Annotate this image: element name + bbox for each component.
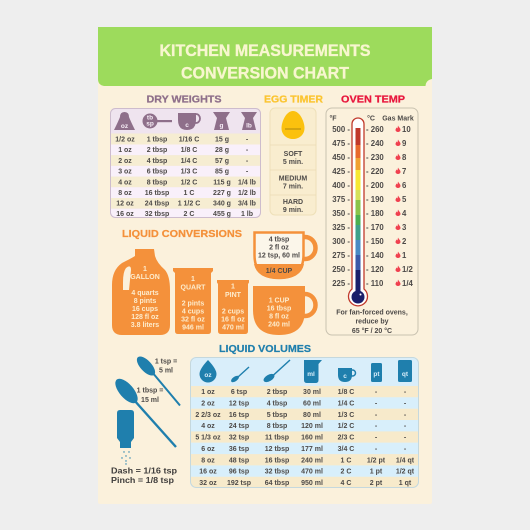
panel: liquid volumes table (190, 357, 419, 488)
temperature rows: 9 (402, 139, 407, 148)
liquid volumes rows: 4 oz (201, 423, 215, 430)
dry weights rows: 3/4 lb (238, 201, 256, 208)
liquid volumes rows: 192 tsp (227, 480, 251, 487)
liquid volumes rows: 6 tsp (231, 389, 247, 396)
one cup: 240 ml (268, 322, 290, 328)
liquid volumes rows: 4 C (341, 480, 351, 487)
temperature rows: 1 (402, 251, 407, 260)
temperature rows: - 190 (366, 195, 384, 204)
liquid volumes rows: 1 pt (370, 469, 383, 476)
dry weights rows: 227 g (213, 190, 231, 197)
icon: small spoon (230, 367, 249, 383)
dry weights rows: 24 tbsp (145, 201, 169, 208)
gallon jug: 1 (143, 266, 147, 273)
icon: cup: c (185, 122, 189, 129)
dry weights rows: 28 g (215, 147, 229, 154)
temperature rows: - 240 (366, 139, 384, 148)
quarter cup: 4 tbsp (269, 236, 289, 244)
liquid volumes rows: - (375, 389, 378, 396)
temperature rows: - 180 (366, 209, 384, 218)
thermometer (349, 118, 368, 306)
pint jar: 2 cups (222, 308, 244, 316)
gallon jug: GALLON (130, 274, 160, 281)
dry weights rows: 4 tbsp (147, 158, 167, 165)
liquid volumes rows: 1/8 C (338, 389, 354, 396)
liquid volumes rows: 36 tsp (229, 446, 249, 453)
dry weights rows: 1/2 lb (238, 190, 256, 197)
pint jar (217, 280, 249, 334)
icon: teaspoon: 1 tsp = (155, 358, 177, 366)
liquid volumes rows: 1 C (341, 457, 351, 464)
liquid volumes rows: 30 ml (303, 389, 321, 396)
column headings: °F (329, 114, 337, 122)
gallon jug: 3.8 liters (131, 322, 159, 329)
icon: measuring jug (304, 360, 322, 383)
dry weights rows: 4 oz (118, 179, 132, 186)
header banner (98, 27, 432, 86)
icon: tablespoon: sp (146, 120, 154, 128)
temperature rows: 450 - (332, 153, 350, 162)
pint jar: PINT (225, 292, 242, 299)
liquid volumes rows: - (375, 400, 378, 408)
temperature rows: 2 (402, 237, 407, 246)
temperature rows: 350 - (332, 209, 350, 218)
temperature rows: - 140 (366, 251, 384, 260)
temperature rows: 225 - (332, 279, 350, 288)
icon: cup: c (343, 373, 347, 380)
liquid volumes rows: 177 ml (301, 446, 323, 453)
dry weights rows: - (246, 136, 249, 144)
quarter cup: 12 tsp, 60 ml (258, 252, 300, 260)
dry weights rows: 340 g (213, 201, 231, 208)
icon: tablespoon: 1 tbsp = (137, 388, 163, 394)
icon: ounce weight: oz (121, 123, 129, 130)
liquid volumes rows: 240 ml (301, 457, 323, 464)
liquid volumes rows: 48 tsp (229, 457, 249, 464)
dry weights rows: 16 oz (116, 211, 134, 218)
liquid volumes rows: 5 tbsp (267, 412, 287, 419)
quart jar: 2 pints (182, 300, 204, 308)
icon: tablespoon: tb (147, 114, 153, 122)
liquid volumes rows: - (375, 412, 378, 419)
liquid volumes rows: 32 oz (199, 480, 217, 487)
gallon jug (112, 249, 170, 335)
dry weights rows: 1/3 C (181, 169, 197, 176)
icon: pound scale: lb (246, 122, 252, 130)
liquid volumes rows: 64 tbsp (265, 480, 289, 487)
icon: ounce drop: oz (204, 372, 212, 379)
fan-forced note: 65 °F / 20 °C (352, 327, 392, 335)
heading: liquid volumes: LIQUID VOLUMES (219, 343, 311, 355)
liquid volumes rows: 12 tsp (229, 400, 249, 408)
temperature rows: 6 (402, 181, 407, 190)
icon: teaspoon: 5 ml (159, 368, 173, 374)
temperature rows: 500 - (332, 125, 350, 134)
temperature rows: 1/2 (402, 265, 414, 274)
icon: ounce weight (114, 112, 135, 130)
temperature rows: 275 - (332, 251, 350, 260)
gallon jug: 8 pints (134, 298, 156, 305)
dry weights rows: 2 tbsp (147, 147, 167, 154)
liquid volumes rows: 16 tsp (229, 412, 249, 419)
temperature rows: 8 (402, 153, 407, 162)
temperature rows: - 110 (366, 279, 384, 288)
liquid volumes rows: 120 ml (301, 423, 323, 430)
dry weights rows: 455 g (213, 211, 231, 218)
temperature rows: - 260 (366, 125, 384, 134)
liquid volumes rows: 6 oz (201, 446, 215, 453)
dry weights rows: 1/4 C (181, 158, 197, 165)
temperature rows: - 170 (366, 223, 384, 232)
quarter cup (254, 232, 316, 279)
liquid volumes rows: 4 tbsp (267, 400, 287, 408)
liquid volumes rows: - (404, 435, 407, 442)
temperature rows: 425 - (332, 167, 350, 176)
title: CONVERSION CHART (181, 64, 349, 82)
liquid volumes rows: 3/4 C (338, 446, 354, 453)
quart jar: 946 ml (182, 324, 204, 332)
icon: ounce drop (200, 360, 216, 382)
liquid volumes rows: 1 oz (201, 389, 215, 396)
dry weights rows: - (246, 169, 249, 176)
liquid volumes rows: 1/3 C (338, 412, 354, 419)
one cup: 16 tbsp (267, 306, 291, 312)
egg times: MEDIUM (279, 176, 307, 182)
icon: gram scale: g (220, 122, 224, 130)
quart jar: 32 fl oz (181, 316, 205, 324)
temperature rows: - 230 (366, 153, 384, 162)
temperature rows: 250 - (332, 265, 350, 274)
temperature rows: 300 - (332, 237, 350, 246)
dry weights rows: 1 C (184, 190, 194, 197)
heading: liquid conversions: LIQUID CONVERSIONS (122, 228, 242, 240)
one cup (253, 286, 316, 335)
dry weights rows: 6 tbsp (147, 169, 167, 176)
dry weights rows: 1 lb (241, 211, 253, 218)
dry weights rows: 115 g (213, 179, 231, 186)
liquid volumes rows: - (404, 412, 407, 419)
dry weights rows: 8 tbsp (147, 179, 167, 186)
liquid volumes rows: 2 2/3 oz (195, 412, 221, 419)
heading: oven temp: OVEN TEMP (341, 94, 405, 106)
liquid volumes rows: 160 ml (301, 435, 323, 442)
temperature rows (332, 125, 414, 288)
quart jar: 4 cups (182, 308, 204, 316)
dry weights rows: 1/4 lb (238, 179, 256, 186)
icon: pound scale (241, 112, 257, 130)
quart jar (173, 268, 213, 334)
temperature rows: 5 (402, 195, 407, 204)
liquid volumes rows: 2 C (341, 469, 351, 476)
dry weights rows: 2 oz (118, 158, 132, 165)
liquid volumes rows: 8 oz (201, 457, 215, 464)
poster background (98, 27, 432, 504)
temperature rows: 400 - (332, 181, 350, 190)
egg times (279, 151, 307, 214)
panel: oven temperature (326, 108, 418, 335)
fan-forced note: reduce by (355, 318, 389, 326)
liquid volumes rows: 2 pt (370, 480, 383, 487)
icon: pint carton (371, 363, 382, 382)
dry weights rows: 12 oz (116, 201, 134, 208)
dry weights rows: 57 g (215, 158, 229, 165)
temperature rows: 3 (402, 223, 407, 232)
liquid volumes rows: - (375, 423, 378, 430)
temperature rows: - 220 (366, 167, 384, 176)
liquid volumes rows (195, 389, 415, 487)
pint jar: 470 ml (222, 324, 244, 332)
gallon jug: 4 quarts (131, 290, 159, 297)
liquid volumes rows: - (375, 446, 378, 453)
dry weights rows: 16 tbsp (145, 190, 169, 197)
temperature rows: 10 (402, 125, 411, 134)
liquid volumes rows: 80 ml (303, 412, 321, 419)
quarter cup: 1/4 CUP (266, 268, 293, 275)
dry weights rows: 15 g (215, 136, 229, 144)
fan-forced note (336, 310, 408, 335)
one cup: 8 fl oz (269, 314, 289, 320)
dry weights rows: 1 tbsp (147, 136, 167, 144)
dry weights rows: 3 oz (118, 169, 132, 176)
icon: quart carton (398, 360, 412, 382)
dry weights rows: 8 oz (118, 190, 132, 197)
liquid volumes rows: 32 tsp (229, 435, 249, 442)
egg times: 7 min. (283, 184, 303, 190)
egg times: 5 min. (283, 159, 303, 166)
liquid volumes rows: - (404, 446, 407, 453)
fan-forced note: For fan-forced ovens, (336, 310, 408, 316)
dash and pinch text (111, 466, 177, 485)
liquid volumes rows: 96 tsp (229, 469, 249, 476)
dry weights rows: 32 tbsp (145, 211, 169, 218)
egg times: SOFT (284, 151, 303, 158)
gallon jug: 128 fl oz (131, 314, 159, 321)
quart jar: 1 (191, 276, 195, 283)
liquid volumes rows: - (375, 435, 378, 442)
dry weights rows: - (246, 147, 249, 154)
liquid volumes rows: - (404, 400, 407, 408)
egg times: HARD (283, 199, 303, 206)
quarter cup: 2 fl oz (269, 244, 289, 252)
liquid volumes rows: 1/4 qt (396, 457, 415, 464)
dash and pinch text: Pinch = 1/8 tsp (111, 475, 174, 485)
liquid volumes rows: 2/3 C (338, 435, 354, 442)
liquid volumes rows: 1/2 C (338, 423, 354, 430)
temperature rows: - 150 (366, 237, 384, 246)
liquid volumes rows: 12 tbsp (265, 446, 289, 453)
temperature rows: - 200 (366, 181, 384, 190)
panel: dry weights table (110, 108, 261, 218)
icon: measuring jug: ml (307, 371, 315, 378)
liquid volumes rows: 32 tbsp (265, 469, 289, 476)
temperature rows: 4 (402, 209, 407, 218)
liquid volumes rows: 950 ml (301, 480, 323, 487)
icon: large spoon (262, 360, 290, 384)
icon: egg (282, 111, 304, 139)
liquid volumes rows: 1/4 C (338, 400, 354, 408)
heading: egg timer: EGG TIMER (264, 94, 323, 106)
icon: tablespoon (111, 375, 176, 447)
liquid volumes rows: 1 qt (399, 480, 412, 487)
heading: dry weights: DRY WEIGHTS (146, 94, 222, 106)
liquid volumes rows: 2 tbsp (267, 389, 287, 396)
liquid volumes rows: 16 oz (199, 469, 217, 476)
liquid volumes rows: - (404, 423, 407, 430)
icon: teaspoon (134, 353, 180, 406)
icon: quart carton: qt (402, 371, 409, 378)
column headings (329, 114, 414, 122)
dry weights rows: 1/8 C (181, 147, 197, 154)
dry weights rows: 1/2 oz (115, 136, 135, 144)
temperature rows: 475 - (332, 139, 350, 148)
temperature rows: 1/4 (402, 279, 414, 288)
gallon jug: 16 cups (132, 306, 158, 313)
icon: cup (178, 113, 200, 130)
dash and pinch text: Dash = 1/16 tsp (111, 466, 177, 476)
icon: pint carton: pt (373, 371, 380, 378)
column headings: Gas Mark (382, 116, 414, 122)
liquid volumes rows: 60 ml (303, 400, 321, 408)
liquid volumes rows: 8 tbsp (267, 423, 287, 430)
temperature rows: - 120 (366, 265, 384, 274)
icon: gram scale (213, 112, 230, 130)
title: KITCHEN MEASUREMENTS (160, 42, 370, 60)
dry weights rows: - (246, 158, 249, 165)
one cup: 1 CUP (269, 298, 290, 304)
liquid volumes rows: 2 oz (201, 400, 215, 408)
dry weights rows (115, 136, 256, 218)
pint jar: 16 fl oz (221, 316, 245, 324)
liquid volumes rows: 470 ml (301, 469, 323, 476)
liquid volumes rows: - (404, 389, 407, 396)
temperature rows: 7 (402, 167, 406, 176)
liquid volumes rows: 11 tbsp (265, 435, 289, 442)
icon: tablespoon: 15 ml (141, 397, 159, 404)
liquid volumes rows: 1/2 pt (367, 457, 386, 464)
liquid volumes rows: 5 1/3 oz (195, 435, 221, 442)
liquid volumes rows: 24 tsp (229, 423, 249, 430)
egg times: 9 min. (283, 207, 303, 214)
dry weights rows: 2 C (184, 211, 194, 218)
temperature rows: 375 - (332, 195, 350, 204)
liquid volumes rows: 1/2 qt (396, 469, 415, 476)
icon: tablespoon (142, 114, 172, 128)
temperature rows: 325 - (332, 223, 350, 232)
dry weights rows: 1 1/2 C (178, 201, 200, 208)
liquid volumes rows: 16 tbsp (265, 457, 289, 464)
dry weights rows: 1/2 C (181, 179, 197, 186)
dry weights rows: 85 g (215, 169, 229, 176)
dry weights rows: 1/16 C (179, 136, 199, 144)
icon: cup (338, 368, 356, 382)
panel: egg timer (270, 108, 316, 215)
pint jar: 1 (231, 284, 235, 290)
title (160, 42, 370, 82)
quart jar: QUART (181, 284, 206, 292)
icon: shaker bottle (117, 410, 134, 465)
column headings: °C (367, 114, 375, 122)
dry weights rows: 1 oz (118, 147, 132, 154)
